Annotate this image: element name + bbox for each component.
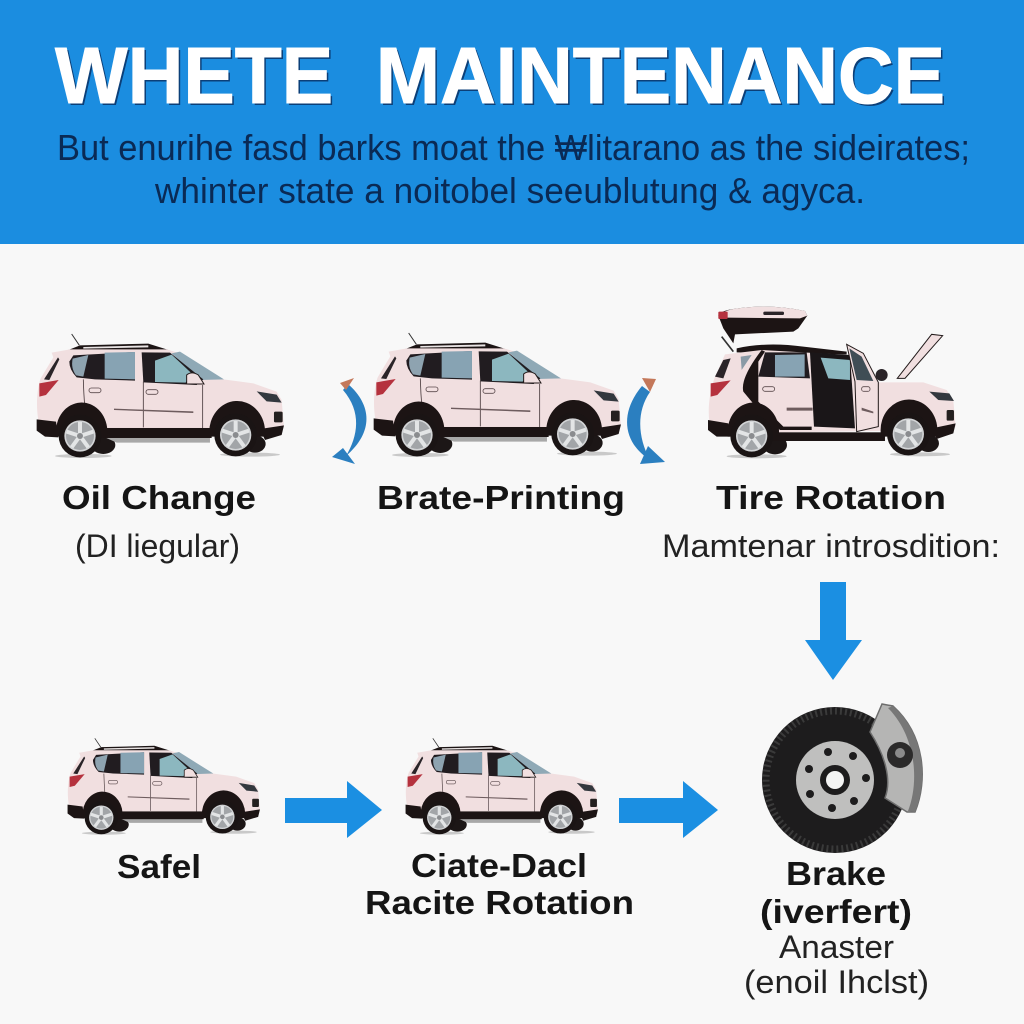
header subtitle (57, 127, 970, 211)
label: brake: (iverfert) (760, 893, 912, 930)
step: brake printing (374, 333, 625, 516)
title: WHETE MAINTENANCE (57, 33, 947, 122)
icon: small SUV, safel (68, 738, 260, 835)
step: tire rotation (662, 307, 1000, 564)
title: WHETE MAINTENANCE (55, 31, 945, 120)
icon: SUV with open doors (708, 307, 956, 458)
label: tire rotation: Tire Rotation (716, 479, 946, 516)
step: brake (744, 704, 929, 1000)
note: tire rotation: Mamtenar introsdition: (662, 528, 1000, 564)
header subtitle: But enurihe fasd barks moat the ₩litarano as the sideirates; (57, 127, 970, 168)
note: oil change: (DI liegular) (75, 528, 240, 564)
note: brake: Anaster (779, 929, 894, 965)
label: brake printing: Brate-Printing (377, 479, 625, 516)
icon: pink SUV, brake printing (374, 333, 621, 457)
arrow: right one (285, 781, 382, 838)
label: brake (760, 855, 912, 930)
header band (0, 0, 1024, 244)
label: racite rotation: Racite Rotation (365, 884, 634, 921)
icon: pink SUV, oil change (37, 334, 284, 458)
arrow: curved right (627, 378, 665, 464)
icon: small SUV, racite rotation (406, 738, 598, 835)
label: brake: Brake (786, 855, 886, 892)
step: racite rotation (365, 738, 634, 921)
arrow: curved left (332, 378, 366, 464)
label: safel: Safel (117, 848, 201, 885)
label: oil change: Oil Change (62, 479, 256, 516)
step: safel (68, 738, 260, 885)
note: brake (744, 929, 929, 1000)
arrow: down (805, 582, 862, 680)
step: oil change (37, 334, 284, 564)
icon: brake disc and caliper (762, 704, 922, 853)
note: brake: (enoil Ihclst) (744, 964, 929, 1000)
label: racite rotation: Ciate-Dacl (411, 847, 587, 884)
label: racite rotation (365, 847, 634, 921)
header subtitle: whinter state a noitobel seeublutung & agyca. (154, 170, 865, 211)
arrow: right two (619, 781, 718, 838)
